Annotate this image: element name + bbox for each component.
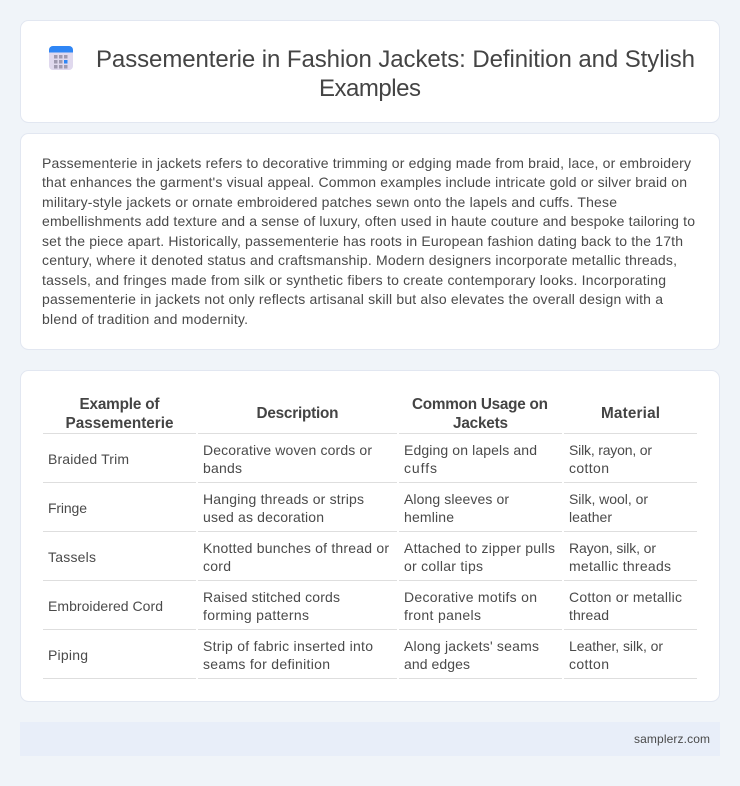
text block: description paragraph: embellishments add texture and a sense of luxury, often used in haute couture and bespoke tailoring to (42, 213, 695, 229)
text block: description paragraph: set the piece apart. Historically, passementerie has roots in European fashion dating back to the 17th (42, 233, 683, 249)
row: fringe: Along sleeves or (404, 491, 509, 507)
footer bar (20, 722, 720, 756)
text block: description paragraph: tassels, and fringes made from silk or synthetic fibers to create contemporary looks. Incorporating (42, 272, 666, 288)
footer bar: samplerz.com (634, 732, 710, 746)
row: braided trim: Braided Trim (48, 451, 129, 467)
row: piping: Piping (48, 647, 88, 663)
row: embroidered cord: thread (569, 607, 609, 623)
row: embroidered cord: Embroidered Cord (48, 598, 163, 614)
row: fringe: hemline (404, 509, 454, 525)
row: braided trim: Edging on lapels and (404, 442, 537, 458)
table rules (43, 433, 697, 679)
table header: Common Usage on (412, 396, 548, 413)
row: fringe: used as decoration (203, 509, 324, 525)
row: embroidered cord: forming patterns (203, 607, 309, 623)
text block: description paragraph: Passementerie in jackets refers to decorative trimming or edging made from braid, lace, or embroidery (42, 155, 691, 171)
table header: Material (601, 405, 660, 422)
row: braided trim: Decorative woven cords or (203, 442, 372, 458)
row: braided trim: Silk, rayon, or (569, 442, 652, 458)
row: fringe (48, 491, 648, 525)
row: piping: seams for definition (203, 656, 330, 672)
panel: description (20, 134, 720, 350)
row: tassels: metallic threads (569, 558, 671, 574)
row: embroidered cord: Decorative motifs on (404, 589, 537, 605)
row: embroidered cord: Raised stitched cords (203, 589, 340, 605)
table header: Description (256, 405, 338, 422)
row: embroidered cord: front panels (404, 607, 481, 623)
row: embroidered cord: Cotton or metallic (569, 589, 682, 605)
title: Passementerie in Fashion Jackets: Definition and Stylish (96, 46, 695, 73)
icon: calendar (49, 46, 73, 70)
row: piping: cotton (569, 656, 609, 672)
panel: title card (20, 20, 720, 122)
row: tassels: cord (203, 558, 231, 574)
text block: description paragraph: that enhances the garment's visual appeal. Common examples include intricate gold or silver braid on (42, 174, 687, 190)
row: tassels: Tassels (48, 549, 96, 565)
table header (66, 396, 660, 432)
row: piping: and edges (404, 656, 470, 672)
row: piping: Strip of fabric inserted into (203, 638, 373, 654)
text block: description paragraph: military-style jackets or ornate embroidered patches sewn onto the lapels and cuffs. These (42, 194, 617, 210)
row: tassels: Knotted bunches of thread or (203, 540, 389, 556)
row: fringe: leather (569, 509, 612, 525)
table header: Jackets (453, 415, 508, 432)
row: tassels: Rayon, silk, or (569, 540, 656, 556)
row: fringe: Fringe (48, 500, 87, 516)
table header: Example of (80, 396, 160, 413)
row: braided trim: cotton (569, 460, 609, 476)
text block: description paragraph: century, where it denoted status and craftsmanship. Modern designers incorporate metallic threads, (42, 252, 677, 268)
row: piping: Leather, silk, or (569, 638, 663, 654)
text block: description paragraph: passementerie in jackets not only reflects artisanal skill but also elevates the overall design with a (42, 291, 663, 307)
row: embroidered cord (48, 589, 682, 623)
title: Examples (319, 75, 421, 102)
table header: Passementerie (66, 415, 174, 432)
text block: description paragraph (42, 155, 695, 327)
row: piping: Along jackets' seams (404, 638, 539, 654)
row: tassels (48, 540, 671, 574)
row: tassels: or collar tips (404, 558, 483, 574)
row: braided trim: cuffs (404, 460, 437, 476)
row: fringe: Hanging threads or strips (203, 491, 364, 507)
row: tassels: Attached to zipper pulls (404, 540, 555, 556)
title (96, 46, 695, 102)
panel: table card (20, 370, 720, 702)
row: piping (48, 638, 663, 672)
row: fringe: Silk, wool, or (569, 491, 648, 507)
row: braided trim (48, 442, 652, 476)
text block: description paragraph: blend of tradition and modernity. (42, 311, 248, 327)
row: braided trim: bands (203, 460, 242, 476)
